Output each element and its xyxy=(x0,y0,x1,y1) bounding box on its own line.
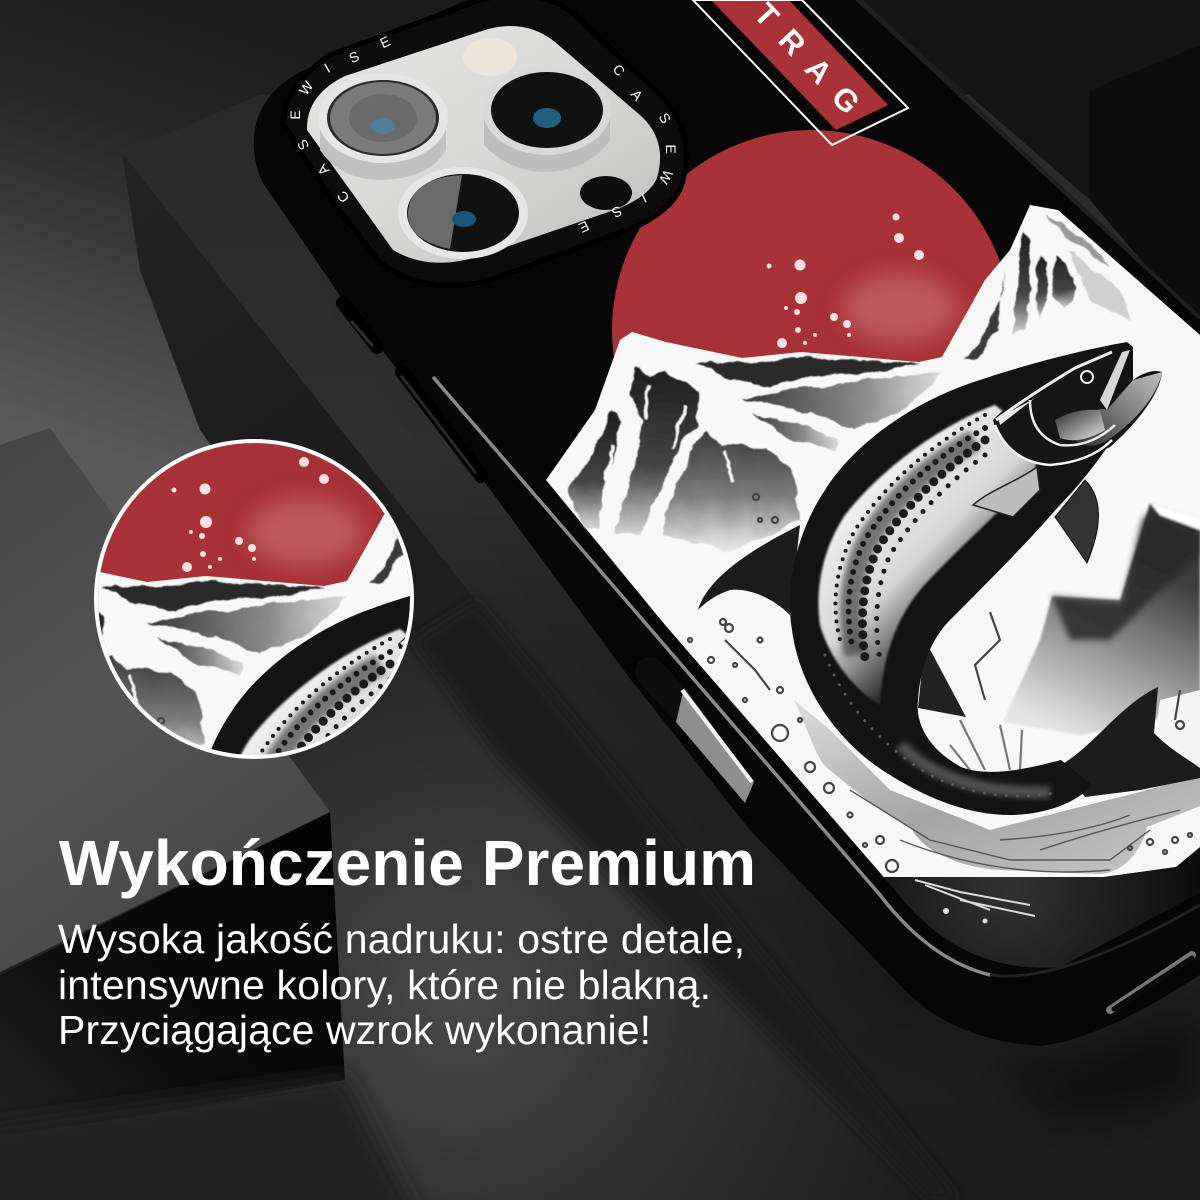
belly highlight xyxy=(818,405,1040,705)
lower black print xyxy=(884,847,1200,968)
brand ring text: right: A xyxy=(628,86,647,104)
background: lower floor glow xyxy=(0,600,1200,1200)
brand ring text: right: S xyxy=(609,203,625,221)
camera glass xyxy=(307,26,660,263)
spray on black xyxy=(915,880,1035,922)
brand ring text: left: E xyxy=(287,110,303,120)
brand ring text: right: C xyxy=(610,61,628,79)
side button: upper xyxy=(343,303,377,347)
heading: Wykończenie Premium xyxy=(59,827,756,899)
phone body xyxy=(254,0,1200,1046)
brand ring text: right: E xyxy=(576,218,592,236)
phone shadow xyxy=(263,183,1200,1120)
lens top-left xyxy=(318,73,448,180)
brand ring text: left: A xyxy=(313,161,332,179)
brand ring text: right: E xyxy=(663,144,679,154)
label: printed red tag xyxy=(693,0,908,145)
side button: volume xyxy=(402,372,481,476)
fin: dorsal left xyxy=(698,525,800,615)
brand ring text: left: S xyxy=(294,137,312,153)
fin: anal xyxy=(918,650,966,717)
description: Przyciągające wzrok wykonanie! xyxy=(58,1007,651,1053)
brand ring text: left: W xyxy=(296,77,317,98)
fin: tail xyxy=(1061,687,1200,797)
brand ring text: right: W xyxy=(655,167,676,187)
microphone xyxy=(580,176,632,210)
flash xyxy=(463,38,517,76)
brand ring text: left xyxy=(287,33,393,206)
printed artwork xyxy=(546,130,1200,1000)
body xyxy=(790,342,1162,815)
brand ring text: left: E xyxy=(377,33,393,51)
case ring xyxy=(283,0,686,286)
ink: lower-right mountain xyxy=(1003,503,1200,735)
inset: magnified print detail xyxy=(94,439,414,759)
phone silver edge xyxy=(433,377,990,975)
camera island xyxy=(283,0,686,286)
brand ring text: left: I xyxy=(321,60,333,76)
brand ring text: right: I xyxy=(639,190,649,206)
port xyxy=(1110,955,1192,1010)
salmon xyxy=(698,342,1200,815)
snowy mountains xyxy=(546,205,1200,877)
brand ring text: right xyxy=(576,61,679,236)
ink: right mountain xyxy=(965,212,1130,360)
fin: pectoral rear xyxy=(1055,480,1099,563)
platform: lower-left block xyxy=(0,428,430,1200)
red sun xyxy=(612,130,1012,530)
side button: silver xyxy=(650,672,754,803)
description xyxy=(58,916,745,1053)
lens bottom xyxy=(398,167,528,259)
tail-side sheen xyxy=(900,745,1050,792)
flank dark band xyxy=(851,440,975,655)
brand ring text: right: S xyxy=(656,110,674,126)
brand ring text: left: C xyxy=(334,188,352,206)
water droplets xyxy=(688,494,1192,872)
ink: left mountain xyxy=(566,358,942,550)
head xyxy=(993,347,1162,465)
water splash xyxy=(794,700,1200,874)
description: intensywne kolory, które nie blakną. xyxy=(58,962,711,1008)
phone right edge xyxy=(860,0,1200,318)
fin: pectoral front xyxy=(973,467,1040,517)
description: Wysoka jakość nadruku: ostre detale, xyxy=(58,916,745,962)
scale spots xyxy=(825,415,1060,796)
brand ring text: left: S xyxy=(346,48,362,66)
lens top-right xyxy=(483,65,611,172)
white splash right of tail xyxy=(1157,690,1200,720)
